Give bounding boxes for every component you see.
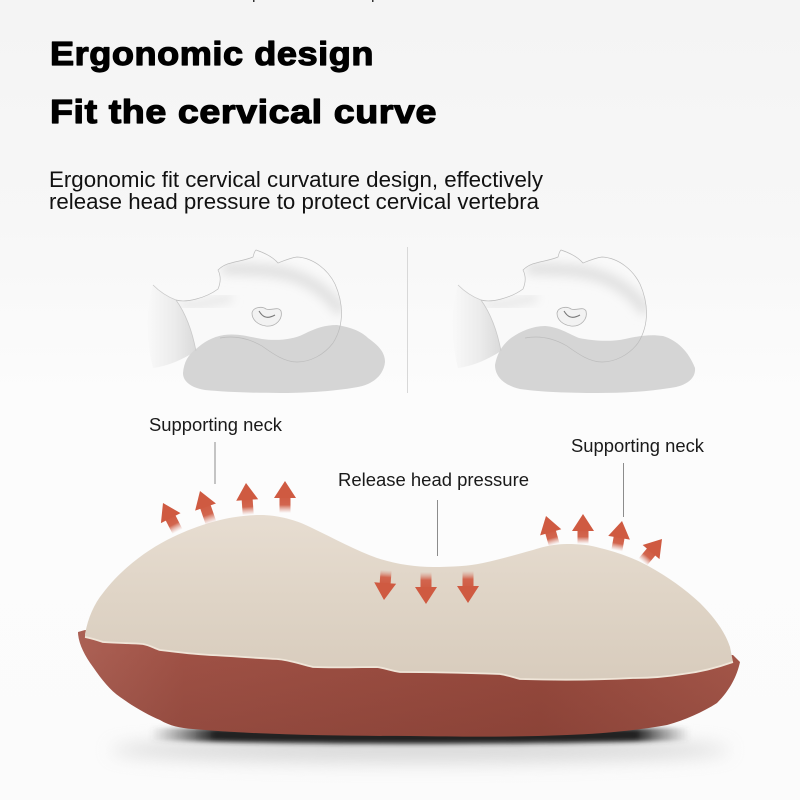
title: Fit the cervical curve [50, 94, 437, 131]
description text: release head pressure to protect cervical vertebra [49, 189, 539, 214]
arrows: centre group pointing down [373, 569, 479, 604]
description text: Ergonomic fit cervical curvature design, effectively [49, 167, 544, 192]
divider [407, 247, 408, 393]
illustration: head on pillow, left [148, 250, 385, 393]
arrows: left group pointing up [153, 481, 296, 537]
label: supporting neck, right: Supporting neck [571, 435, 705, 456]
pillow seam [85, 637, 733, 680]
top text fragment [253, 0, 374, 2]
label: supporting neck, left: Supporting neck [149, 414, 283, 435]
label: supporting neck, right [571, 435, 705, 517]
label: supporting neck, left [149, 414, 283, 484]
title: Ergonomic design [50, 36, 374, 73]
description text [49, 167, 544, 214]
pillow [78, 515, 740, 763]
arrows: right group pointing up [535, 513, 670, 569]
title [50, 36, 437, 131]
floor shadow [110, 737, 730, 763]
pillow top [85, 515, 733, 680]
illustration: head on pillow, right [453, 250, 695, 393]
pillow base [78, 630, 740, 737]
label: release head pressure: Release head pressure [338, 469, 529, 490]
